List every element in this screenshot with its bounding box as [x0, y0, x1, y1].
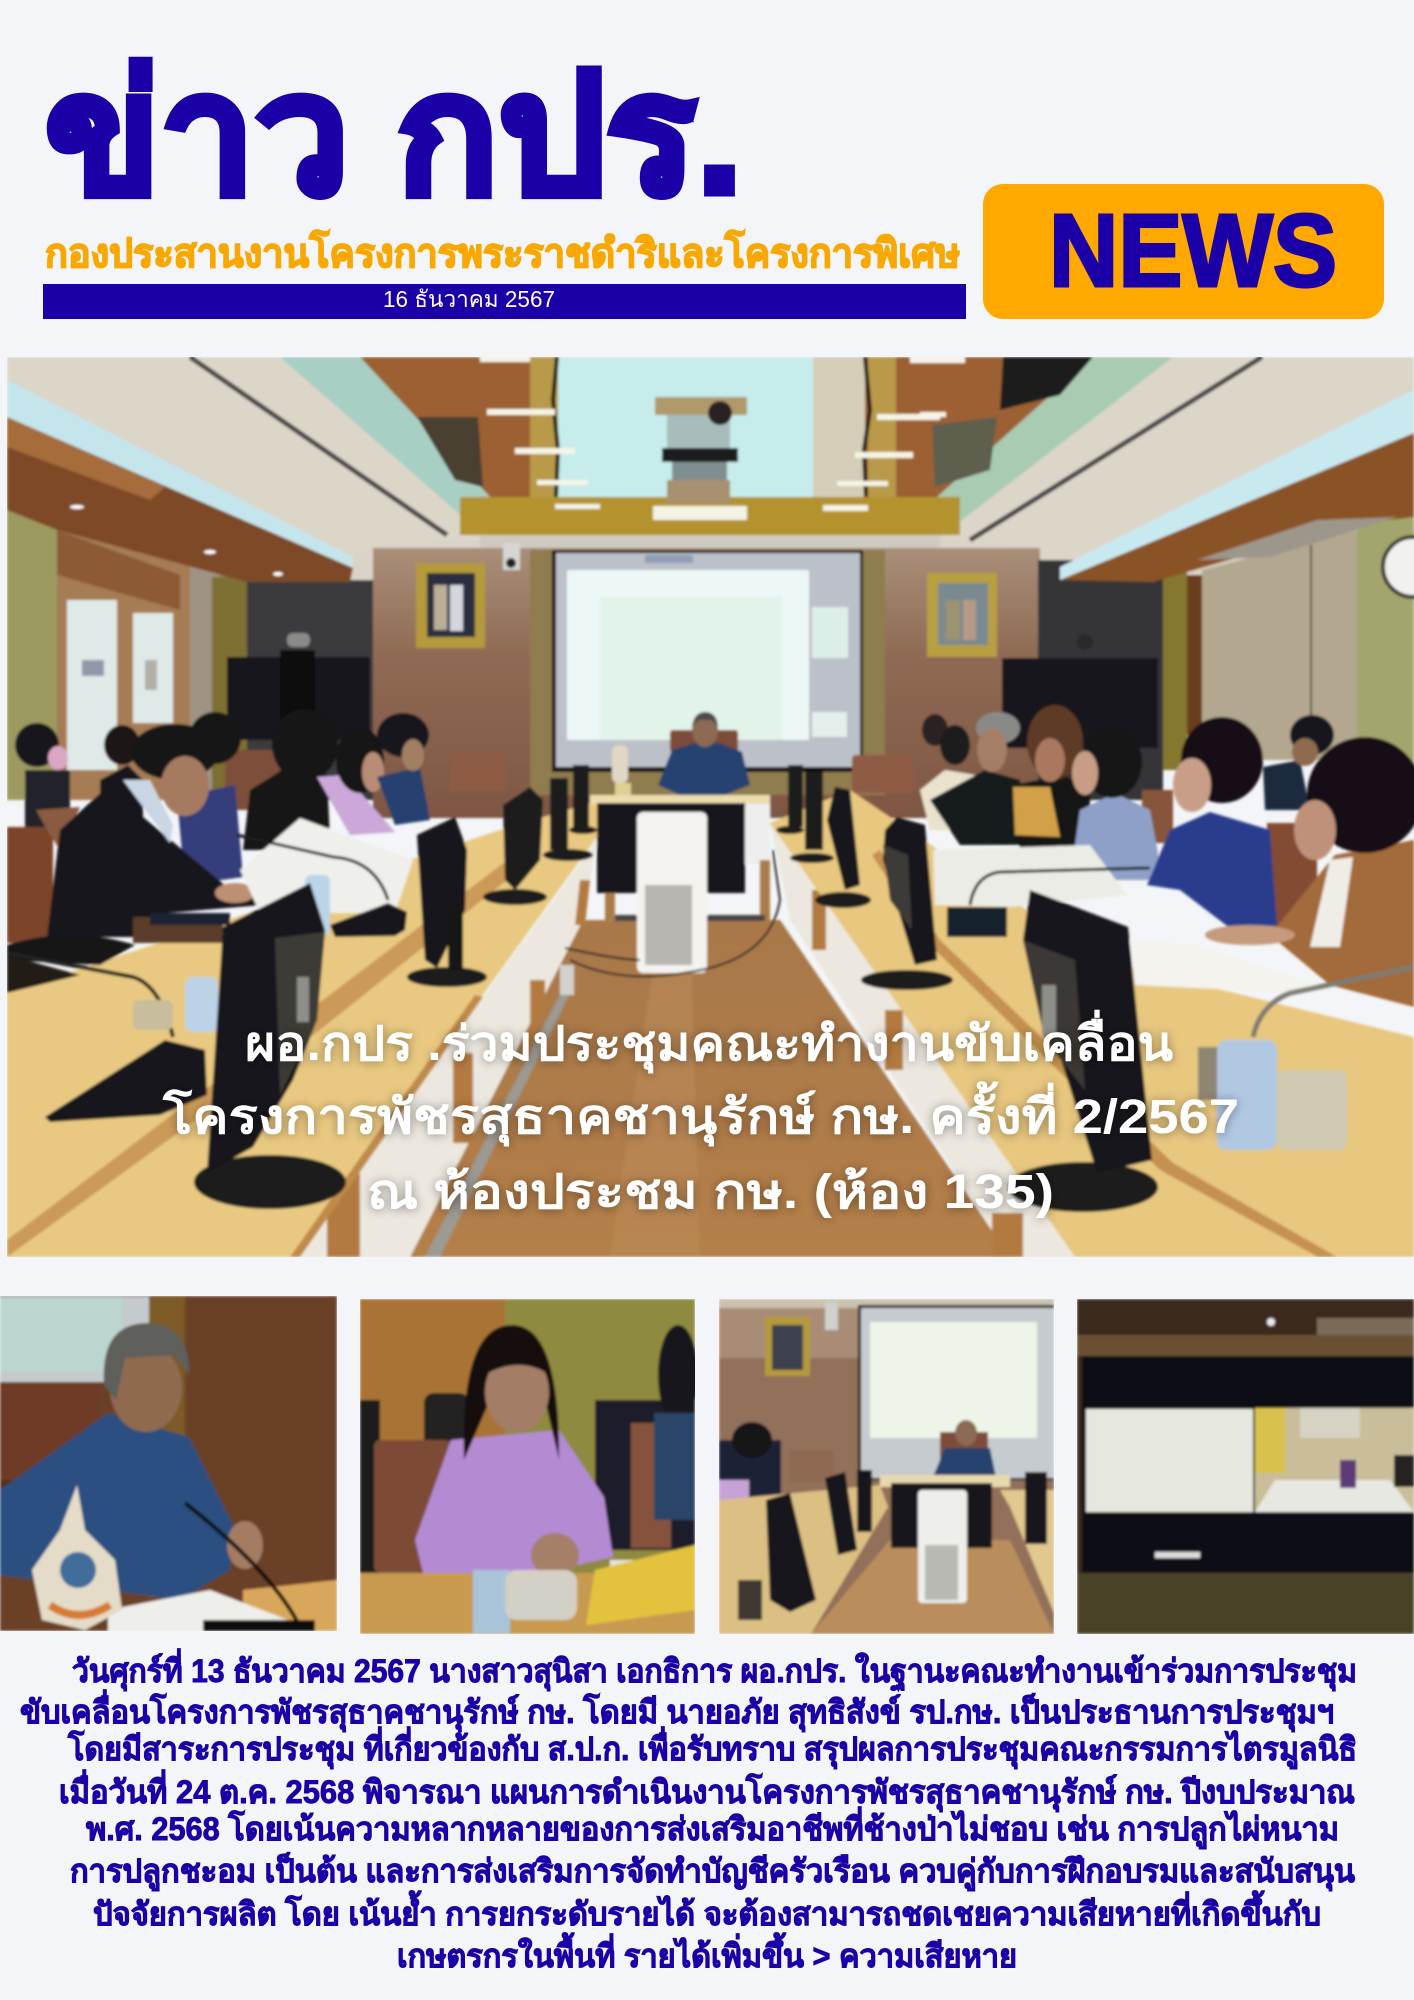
soffits — [7, 380, 1414, 582]
subtitle: กองประสานงานโครงการพระราชดำริและโครงการพิเศษ — [45, 230, 960, 276]
left tables — [7, 800, 600, 1257]
chairs back row — [450, 730, 913, 793]
body text — [20, 1648, 1357, 1974]
body text: การปลูกชะอม เป็นต้น และการส่งเสริมการจัดทำบัญชีครัวเรือน ควบคู่กับการฝึกอบรมและสนับสนุน — [70, 1851, 1355, 1892]
table and paper — [108, 1580, 337, 1631]
chairman — [933, 1420, 996, 1477]
document pane — [1086, 1409, 1253, 1512]
screen — [858, 1305, 1054, 1480]
woman in black — [243, 709, 338, 850]
far left monitors — [543, 765, 597, 861]
table monitors — [194, 765, 1158, 1212]
man in black suit — [47, 724, 262, 937]
monitors and purifier — [738, 1470, 1047, 1620]
body text: ปัจจัยการผลิต โดย เน้นย้ำ การยกระดับรายได้ จะต้องสามารถชดเชยความเสียหายที่เกิดขึ้นกับ — [93, 1890, 1321, 1932]
body text: วันศุกร์ที่ 13 ธันวาคม 2567 นางสาวสุนิสา เอกธิการ ผอ.กปร. ในฐานะคณะทำงานเข้าร่วมการประชุม — [72, 1648, 1357, 1692]
man in navy — [377, 713, 430, 825]
chairs right — [1142, 790, 1317, 927]
center table and purifier — [560, 795, 780, 995]
body text: พ.ศ. 2568 โดยเน้นความหลากหลายของการส่งเสริมอาชีพที่ช้างป่าไม่ชอบ เช่น การปลูกไผ่หนาม — [86, 1806, 1339, 1850]
photo: woman in lilac — [360, 1299, 698, 1634]
emblem — [32, 1485, 122, 1630]
body text: ขับเคลื่อนโครงการพัชรสุธาคชานุรักษ์ กษ. โดยมี นายอภัย สุทธิสังข์ รป.กษ. เป็นประธานการประชุมฯ — [20, 1689, 1334, 1733]
second right monitor — [861, 817, 953, 990]
photo: chairman speaking — [0, 1296, 337, 1631]
date bar: 16 ธันวาคม 2567 — [383, 286, 555, 312]
projection screen — [530, 550, 885, 795]
body text: เกษตรกรในพื้นที่ รายได้เพิ่มขึ้น > ความเสียหาย — [397, 1932, 1017, 1974]
woman blue pattern — [1147, 717, 1277, 932]
projector — [653, 397, 747, 520]
ceiling lights — [480, 357, 965, 511]
woman light blue — [1070, 746, 1160, 882]
portrait frames and cctv — [416, 537, 1414, 657]
far back attendees — [920, 714, 985, 830]
lilac woman — [317, 727, 395, 835]
man in blue shirt — [0, 1323, 263, 1600]
screen — [1082, 1356, 1414, 1573]
av monitors on back wall — [227, 633, 1158, 748]
table and items — [360, 1545, 695, 1634]
right table items — [933, 845, 1414, 1150]
chairman — [612, 712, 750, 795]
body text: โดยมีสาระการประชุม ที่เกี่ยวข้องกับ ส.ป.ก. เพื่อรับทราบ สรุปผลการประชุมคณะกรรมการไตรมูลนิธิ — [67, 1726, 1357, 1770]
title: ข่าว กปร. — [45, 41, 743, 229]
people left side — [7, 709, 430, 993]
woman brown blazer — [1205, 737, 1414, 1007]
left table items — [7, 818, 413, 1122]
photo headline: ณ ห้องประชม กษ. (ห้อง 135) — [367, 1166, 1054, 1219]
second left monitor — [407, 817, 487, 987]
chairs — [7, 750, 280, 993]
body text: เมื่อวันที่ 24 ต.ค. 2568 พิจารณา แผนการดำเนินงานโครงการพัชรสุธาคชานุรักษ์ กษ. ปีงบประมาณ — [59, 1769, 1355, 1813]
woman — [415, 1325, 613, 1577]
right tables — [770, 790, 1414, 1257]
colleague at right — [595, 1325, 698, 1550]
panel: main meeting room photo — [7, 357, 1414, 1257]
photo: video conference display — [1077, 1299, 1414, 1634]
microphone — [185, 1503, 315, 1631]
walls — [7, 510, 1414, 818]
right people — [920, 705, 1414, 1007]
ceiling — [7, 357, 1414, 587]
news badge — [983, 184, 1384, 319]
toolbar — [1155, 1552, 1200, 1558]
photo headline: โครงการพัชรสุธาคชานุรักษ์ กษ. ครั้งที่ 2/2567 — [162, 1081, 1239, 1147]
far right monitors — [776, 765, 834, 863]
floor — [410, 920, 1010, 1257]
front left monitor — [194, 883, 346, 1209]
news badge: NEWS — [1049, 193, 1337, 308]
grey haired man — [930, 712, 1030, 845]
third left monitor — [483, 787, 547, 905]
photo: wide view of meeting — [719, 1299, 1054, 1634]
patterned woman — [177, 712, 243, 885]
far right man — [1263, 715, 1334, 810]
third right monitor — [815, 787, 871, 908]
woman gold blouse — [1013, 705, 1090, 860]
lower wall — [1077, 1573, 1414, 1634]
attendees — [719, 1422, 834, 1510]
date bar — [43, 284, 966, 319]
far left masked attendee — [15, 723, 143, 830]
front right monitor — [1008, 890, 1158, 1212]
header — [43, 41, 1384, 319]
floor and tables — [719, 1475, 1054, 1634]
photo headline: ผอ.กปร .ร่วมประชุมคณะทำงานขับเคลื่อน — [245, 1009, 1173, 1074]
video pane — [1255, 1408, 1414, 1512]
photo headline — [162, 1009, 1239, 1219]
